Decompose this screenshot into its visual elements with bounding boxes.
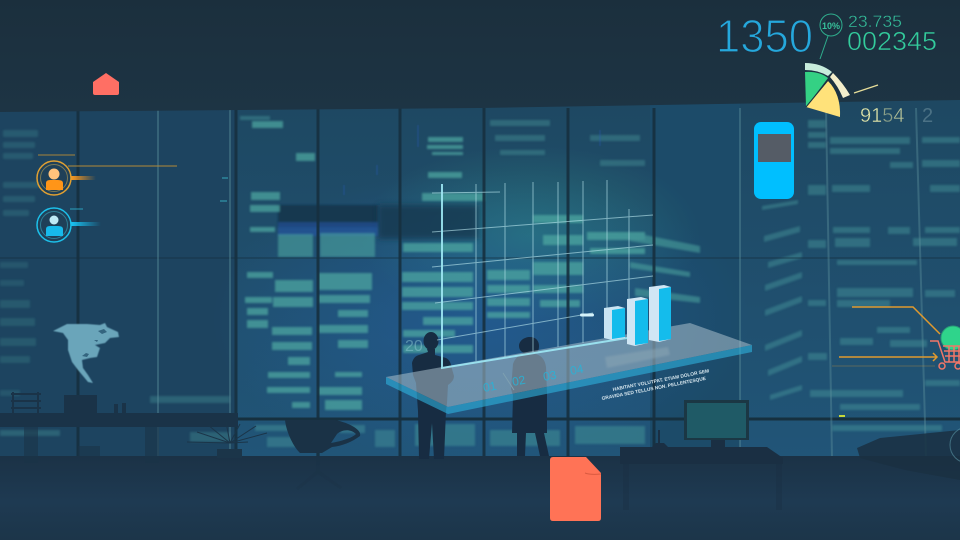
table axis labels: [482, 362, 585, 395]
table axis labels: 04: [569, 362, 585, 378]
building lights: strong: [0, 121, 700, 446]
table caption: GRAVIDA SED TELLUS NON. PELLENTESQUE: [601, 376, 707, 402]
table caption: HABITANT VOLUTPAT. ETIAM DOLOR SEM: [612, 368, 710, 393]
value 23.735: 23.735: [848, 12, 902, 31]
percent callout: 10%: [822, 21, 840, 31]
silhouette: man: [412, 332, 454, 459]
headline counter: 1350: [716, 10, 813, 62]
left desk silhouette with props: [0, 392, 238, 463]
radial gauge: [805, 63, 878, 117]
axis highlight marker: [580, 314, 594, 316]
glass table: [386, 323, 752, 414]
faint percent label: 20: [405, 338, 423, 355]
floor: [0, 456, 960, 540]
value 002345: 002345: [847, 28, 937, 56]
table axis labels: 02: [511, 373, 527, 389]
office chair silhouette: [285, 420, 360, 490]
person badge: orange: [37, 155, 177, 195]
shopping cart callout: [832, 307, 960, 369]
building lights: soft: [0, 116, 960, 447]
file icon: [550, 457, 601, 521]
blue streaks: [344, 125, 600, 195]
sofa silhouette: [857, 430, 960, 480]
faint circle at right edge: [950, 427, 960, 463]
mullions: [0, 108, 960, 458]
ceiling: [0, 0, 960, 112]
bar 1: [604, 306, 625, 340]
percent callout: [820, 14, 842, 59]
window skyline backdrop: [0, 100, 960, 470]
bar reflection: [605, 347, 670, 368]
yellow tick: [839, 415, 845, 417]
table axis labels: 03: [542, 368, 558, 384]
phone card: [754, 122, 794, 199]
bar 3: [649, 285, 671, 342]
faded digit: 2: [922, 105, 933, 127]
map of North America: [53, 323, 119, 383]
person badge: blue: [37, 208, 101, 242]
silhouette: woman: [503, 337, 549, 456]
chart grid: [432, 180, 653, 361]
value 9154: 9154: [860, 105, 904, 127]
chart axes: [442, 184, 627, 368]
bar 2: [627, 297, 648, 346]
3D chart: [386, 180, 752, 414]
table axis labels: 01: [482, 379, 498, 395]
plant silhouette: [187, 422, 267, 458]
right desk with monitor: [620, 400, 783, 510]
house icon: [93, 73, 119, 95]
small cyan ticks: [220, 178, 228, 201]
